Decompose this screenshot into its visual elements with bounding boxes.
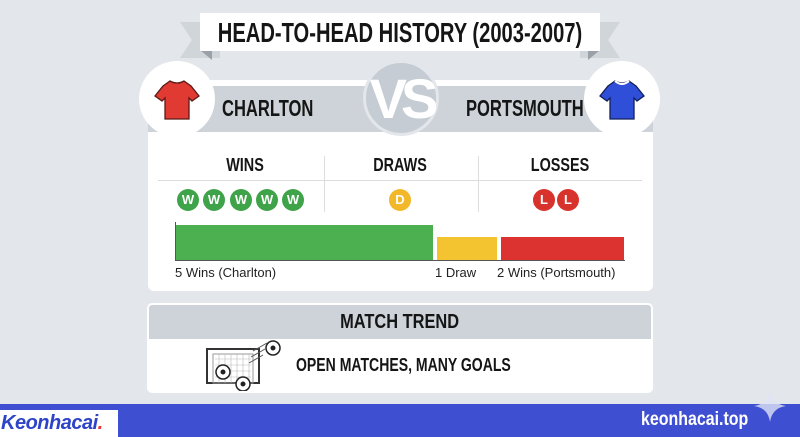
bar labels: 5 Wins (Charlton) xyxy=(175,265,276,280)
website url: keonhacai.top xyxy=(641,409,748,430)
bar labels xyxy=(175,265,615,280)
main card xyxy=(148,80,653,291)
footer xyxy=(0,404,800,437)
title banner: HEAD-TO-HEAD HISTORY (2003-2007) xyxy=(218,17,582,48)
vs circle: VS xyxy=(370,67,432,130)
vs circle xyxy=(363,60,439,136)
icon: red shirt xyxy=(139,61,215,137)
result circles xyxy=(177,189,579,211)
result circles: D xyxy=(395,192,405,207)
result circles: W xyxy=(235,192,247,207)
result circles: L xyxy=(564,192,572,207)
trend text: OPEN MATCHES, MANY GOALS xyxy=(296,355,511,375)
stats headings: LOSSES xyxy=(531,155,589,175)
team band xyxy=(148,86,653,132)
result circles: L xyxy=(540,192,548,207)
icon: sparkle xyxy=(754,392,786,422)
bar labels: 1 Draw xyxy=(435,265,476,280)
bar labels: 2 Wins (Portsmouth) xyxy=(497,265,615,280)
result circles: W xyxy=(261,192,273,207)
match trend header: MATCH TREND xyxy=(340,311,460,333)
team: portsmouth: PORTSMOUTH xyxy=(466,95,584,121)
match trend header xyxy=(149,305,651,339)
result circles: W xyxy=(182,192,194,207)
result circles: W xyxy=(208,192,220,207)
stats headings xyxy=(226,155,589,175)
bar chart xyxy=(175,222,625,261)
title banner xyxy=(180,13,620,60)
stats headings: WINS xyxy=(226,155,264,175)
result circles: W xyxy=(287,192,299,207)
logo: Keonhacai. xyxy=(1,412,103,434)
icon: goal with balls xyxy=(206,340,281,391)
panel: match trend xyxy=(147,303,653,393)
team: charlton: CHARLTON xyxy=(222,95,313,121)
stats headings: DRAWS xyxy=(373,155,427,175)
icon: blue shirt xyxy=(584,61,660,137)
